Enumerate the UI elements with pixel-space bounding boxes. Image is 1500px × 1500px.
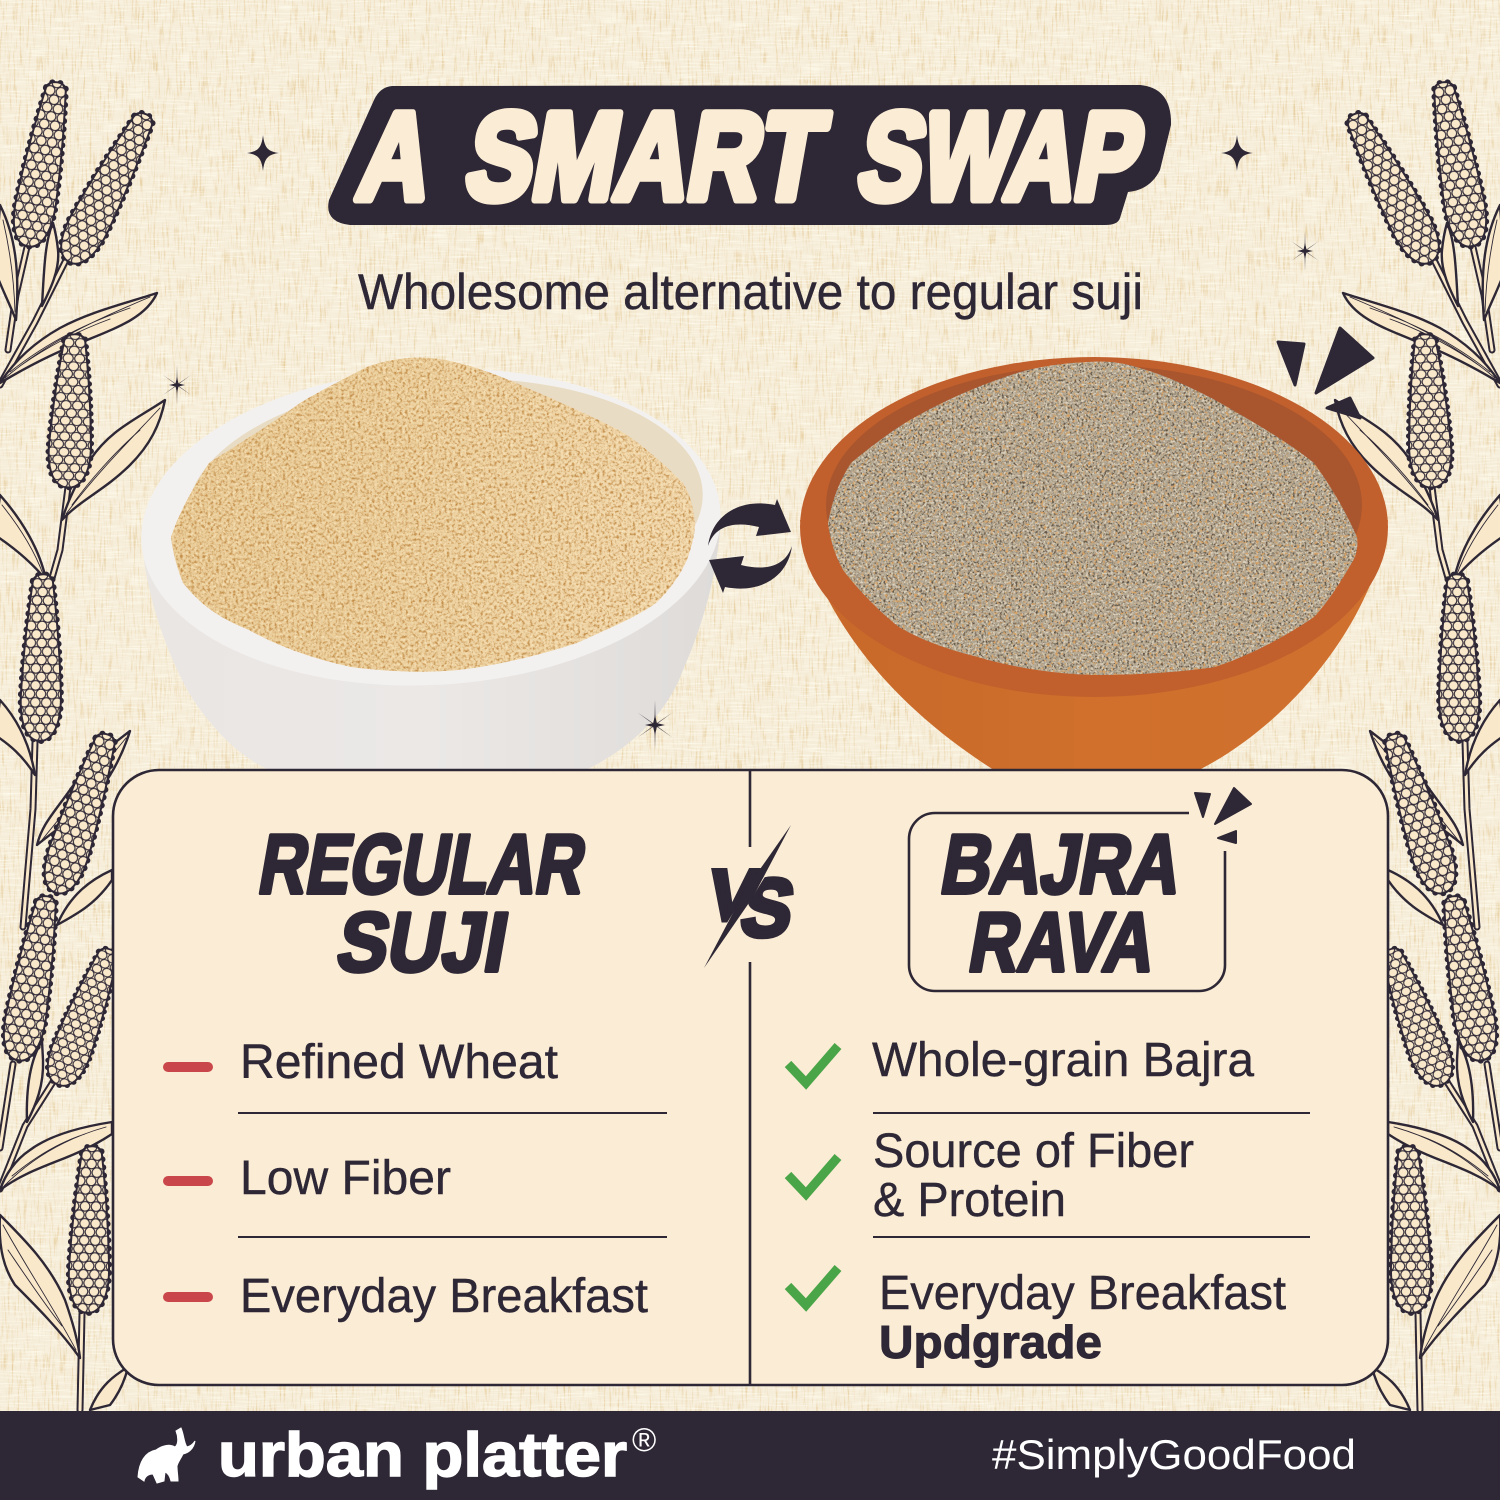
VS badge: S	[735, 862, 801, 954]
heading box: Bajra Rava: BAJRA	[935, 817, 1189, 911]
registered mark: ®	[632, 1421, 656, 1458]
title: A Smart Swap: A	[349, 88, 444, 226]
white bowl with regular suji	[133, 354, 729, 772]
VS badge: V	[702, 855, 764, 936]
sparkle: title left	[247, 135, 279, 171]
sparkle: title right	[1221, 135, 1253, 171]
comparison panel	[113, 770, 1388, 1385]
footer bar	[0, 1411, 1500, 1500]
subtitle: Wholesome alternative to regular suji	[358, 264, 1143, 320]
column: bajra rava list: Whole-grain Bajra	[872, 1034, 1254, 1087]
sparkle: above white bowl	[163, 365, 191, 405]
heading box: Bajra Rava: RAVA	[963, 895, 1163, 989]
sparkle: top right	[1291, 231, 1319, 271]
brand name: urban platter	[218, 1421, 627, 1490]
heading: Regular Suji	[253, 817, 593, 989]
column: regular suji list: Refined Wheat	[240, 1036, 558, 1089]
heading: Regular Suji: REGULAR	[253, 817, 593, 911]
burst marks near clay bowl	[1278, 328, 1373, 418]
hashtag: #SimplyGoodFood	[992, 1431, 1356, 1478]
title: A Smart Swap	[328, 85, 1171, 226]
column: regular suji list: Low Fiber	[240, 1152, 451, 1205]
column: regular suji list: Everyday Breakfast	[240, 1270, 648, 1323]
title: A Smart Swap: SMART	[457, 88, 836, 226]
VS badge	[702, 824, 801, 969]
column: bajra rava list: Source of Fiber	[873, 1125, 1194, 1178]
clay bowl with bajra rava	[800, 357, 1388, 772]
column: bajra rava list: & Protein	[873, 1174, 1066, 1227]
sparkle: on white bowl	[638, 700, 672, 750]
suji pile	[171, 358, 695, 672]
swap arrows icon	[708, 499, 792, 593]
column: regular suji list	[163, 1036, 648, 1323]
heading: Regular Suji: SUJI	[331, 895, 515, 989]
column: bajra rava list: Updgrade	[879, 1316, 1102, 1368]
left millet plant illustration	[0, 79, 165, 1410]
column: bajra rava list: Everyday Breakfast	[879, 1267, 1286, 1320]
rava pile	[828, 362, 1357, 675]
right millet plant illustration	[1335, 79, 1500, 1410]
icon: elephant logo	[138, 1428, 195, 1483]
title: A Smart Swap: SWAP	[849, 88, 1154, 226]
heading box: Bajra Rava	[909, 788, 1251, 991]
column: bajra rava list	[788, 1034, 1286, 1368]
